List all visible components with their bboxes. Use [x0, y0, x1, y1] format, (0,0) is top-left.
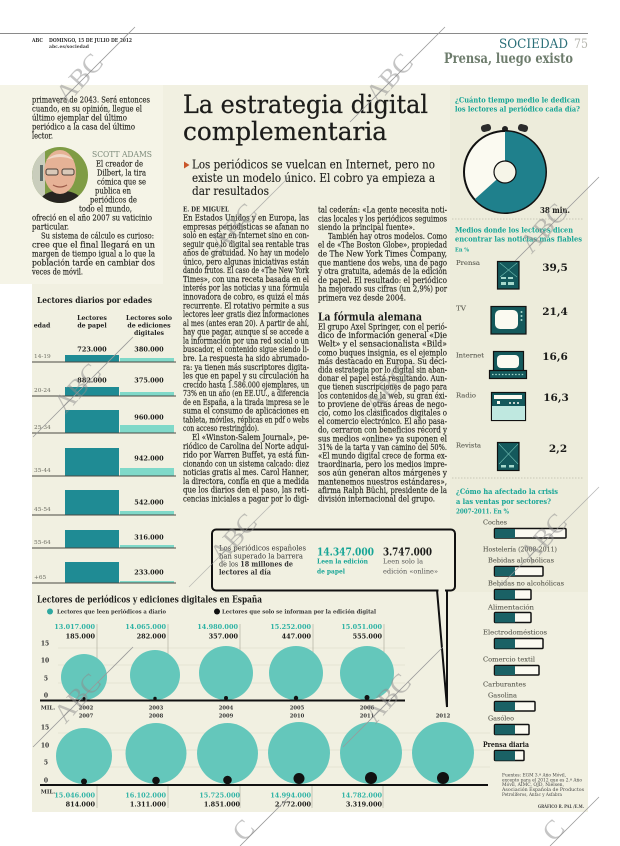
- sector labels: Comercio textil: [483, 656, 535, 664]
- axis labels: 5: [44, 676, 48, 682]
- sources and credit: [501, 772, 584, 810]
- article column 1: al mes (antes eran 20). A partir de ahí,: [183, 318, 309, 329]
- axis labels: MIL.: [41, 706, 55, 712]
- callout: 18 million readers: lectores al día: [219, 568, 271, 576]
- article column 1: interés por las noticias y una fórmula: [183, 283, 309, 294]
- year labels: 2012: [436, 714, 451, 720]
- article column 1: hay que pagar, aunque si se accede a: [183, 328, 309, 338]
- bar values: 723.000: [77, 346, 107, 354]
- media row: Internet: 16,6: [542, 351, 568, 363]
- column headers: [34, 315, 172, 337]
- article column 2: que tienen suscripciones de pago para: [318, 383, 447, 393]
- article column 1: rido por Warren Buffet, ya está fun-: [183, 450, 309, 461]
- bar values: 380.000: [134, 346, 164, 354]
- article column 2: los contenidos de la web, su gran éxi-: [318, 390, 447, 401]
- article column 2: el de «The Boston Globe», propiedad: [318, 241, 447, 251]
- sources and credit: Móvil, AIMC, OJD, Nielsen,: [502, 782, 564, 787]
- legend: [47, 608, 377, 616]
- left column text: primavera de 2043. Será entonces: [32, 94, 150, 106]
- media row: Radio: Radio: [456, 392, 476, 400]
- article column 2: afirma Ralph Büchi, presidente de la: [318, 486, 447, 496]
- article column 2: dida estrategia por lo digital sin aban-: [318, 366, 447, 376]
- sidebar: crisis effect on sales: 2007-2011. En %: [456, 508, 509, 516]
- icon: stopwatch chart: [464, 123, 546, 213]
- chart: daily readers by age: [32, 296, 176, 584]
- article column 2: división internacional del grupo.: [318, 494, 435, 504]
- article column 2: y otra gratuita, además de la edición: [317, 266, 447, 277]
- legend: Lectores que leen periódicos a diario: [57, 608, 166, 616]
- media row: TV: 21,4: [542, 306, 568, 318]
- article column 2: [317, 204, 448, 504]
- sector labels: Electrodomésticos: [483, 628, 548, 636]
- article column 2: cio, como los clasificados digitales o: [318, 408, 447, 418]
- sidebar: crisis effect on sales: [456, 487, 566, 760]
- article column 1: El «Winston-Salem Journal», pe-: [192, 433, 309, 443]
- axis labels: 0: [44, 692, 48, 700]
- digital reader dots: [81, 695, 449, 784]
- axis labels: 15: [41, 724, 49, 732]
- article column 1: riódico de Carolina del Norte adqui-: [183, 441, 309, 452]
- age labels: 55-64: [34, 540, 51, 546]
- age labels: +65: [34, 575, 47, 581]
- year labels: 2005: [290, 706, 305, 712]
- article column 1: cionando con un sistema calcado: diez: [183, 459, 309, 469]
- bar values: 960.000: [134, 414, 164, 422]
- sector labels: Carburantes: [483, 680, 527, 688]
- year labels: 2009: [219, 714, 234, 720]
- bar values: 316.000: [134, 534, 164, 542]
- chart: readers of newspapers and digital editions: Lectores de periódicos y ediciones digitales en España: [37, 594, 262, 606]
- article column 2: el comercio electrónico. El año pasa-: [318, 416, 447, 427]
- watermarks: ABC: ABC: [514, 197, 573, 259]
- watermarks: ABC: ABC: [358, 667, 417, 729]
- page header: [0, 33, 588, 67]
- article column 2: primera vez desde 2004.: [318, 294, 406, 304]
- column headers: edad: [34, 322, 51, 330]
- media row: Prensa: [456, 259, 568, 289]
- bar values: 942.000: [134, 454, 164, 462]
- age labels: 25-34: [34, 425, 51, 431]
- age labels: 35-44: [34, 468, 51, 474]
- sidebar: time spent reading: 38 min.: [540, 205, 570, 215]
- year labels: 2004: [219, 706, 234, 712]
- article column 1: años de gratuidad. No hay un modelo: [183, 249, 309, 259]
- media row: TV: TV: [456, 304, 466, 312]
- left column text: periódico a la casa del último: [32, 122, 135, 132]
- article column 2: «El mundo digital crece de forma ex-: [318, 452, 447, 462]
- sidebar: time spent reading: los lectores al periódico cada día?: [455, 104, 581, 114]
- bottom row values: 15.725.000: [199, 792, 240, 800]
- article column 1: noticias gratis al mes. Carol Hanner,: [183, 468, 309, 478]
- article column 1: lectores leer gratis diez informaciones: [183, 310, 309, 320]
- left column text: publica en: [95, 186, 131, 196]
- article column 1: crecido hasta 1.586.000 ejemplares, un: [183, 380, 309, 390]
- article column 2: El grupo Axel Springer, con el perió-: [318, 322, 447, 332]
- sidebar: crisis effect on sales: a las ventas por sectores?: [456, 497, 552, 506]
- article column 2: ha mejorado sus cifras (un 2,9%) por: [318, 284, 448, 295]
- year labels: 2003: [149, 706, 164, 712]
- chart: readers of newspapers and digital editions: 357.000: [209, 632, 238, 640]
- article column 2: traordinaria, pero los medios impre-: [318, 460, 447, 470]
- media row: TV: [456, 304, 568, 334]
- legend: Lectores que solo se informan por la edición digital: [222, 608, 377, 616]
- title: complementaria: [183, 117, 387, 147]
- article column 2: tal cederán: «La gente necesita noti-: [318, 204, 447, 216]
- subtitle: Los periódicos se vuelcan en Internet, pero no: [192, 158, 435, 172]
- article column 1: suma el consumo de aplicaciones en: [183, 407, 309, 417]
- left column text: margen de tiempo igual a lo que la: [32, 250, 155, 260]
- callout: 18 million readers: de papel: [317, 568, 345, 576]
- sector labels: Alimentación: [487, 604, 535, 612]
- callout: 18 million readers: Leen solo la: [383, 558, 423, 566]
- article column 2: cias locales y los periódicos seguimos: [318, 213, 447, 224]
- article column 1: dando frutos. El caso de «The New York: [183, 266, 310, 276]
- left column text: todo el mundo,: [79, 204, 132, 214]
- axis labels: 10: [41, 658, 49, 664]
- article column 2: mantenemos nuestros estándares»,: [318, 476, 447, 487]
- title: La estrategia digital: [183, 90, 428, 120]
- year labels: 2010: [290, 714, 305, 720]
- left column text: población tarde en cambiar dos: [32, 258, 155, 268]
- chart: readers of newspapers and digital editions: 1.851.000: [204, 800, 240, 808]
- callout: 18 million readers: han superado la barrera: [219, 552, 303, 560]
- sector labels: Bebidas no alcohólicas: [488, 580, 565, 588]
- page header: SOCIEDAD: [499, 37, 568, 52]
- column headers: Lectores: [77, 315, 107, 322]
- article column 2: to proviene de otras áreas de nego-: [318, 399, 447, 410]
- axis labels: [41, 640, 55, 796]
- article column 2: sus medios «online» ya suponen el: [318, 434, 447, 444]
- sidebar: trusted media: encontrar las noticias más fiables: [455, 234, 582, 244]
- callout: 18 million readers: [212, 530, 455, 707]
- left column text: Su sistema de cálculo es curioso:: [41, 230, 154, 242]
- age labels: 14-19: [34, 354, 51, 360]
- watermarks: ABC: ABC: [48, 357, 107, 419]
- article column 2: siendo la principal fuente».: [318, 223, 415, 233]
- top row values: 13.017.000: [54, 623, 95, 631]
- sidebar: crisis effect on sales: Prensa diaria: [483, 740, 529, 749]
- bar values: 542.000: [134, 498, 164, 506]
- bottom row values: 16.102.000: [125, 792, 166, 800]
- article column 1: [183, 214, 310, 504]
- left column text: lector.: [32, 132, 53, 142]
- media row: Internet: [456, 351, 568, 378]
- article column 1: que los diarios den el paso, las reti-: [183, 486, 309, 496]
- article column 1: tableta, móviles, réplicas en pdf o webs: [183, 414, 309, 425]
- left column text: último ejemplar del último: [32, 112, 127, 124]
- page header: DOMINGO, 15 DE JULIO DE 2012: [49, 38, 132, 44]
- watermarks: ABC: ABC: [358, 357, 417, 419]
- chart: readers of newspapers and digital editions: 185.000: [66, 632, 95, 640]
- article column 1: innovadora de cobro, es quizá el más: [183, 292, 309, 302]
- article column 2: La fórmula alemana: [318, 310, 422, 324]
- article column 1: cencias iniciales a pagar por lo digi-: [183, 494, 309, 504]
- year labels: 2006: [360, 706, 375, 712]
- article column 1: buscador, el contenido sigue siendo li-: [183, 345, 309, 355]
- article column 2: que mantiene dos webs, una de pago: [318, 258, 447, 268]
- article column 1: 73% en un año (en EE.UU., a diferencia: [183, 388, 309, 399]
- bottom row values: 15.046.000: [54, 792, 95, 800]
- callout: 18 million readers: 3.747.000: [383, 546, 432, 558]
- left column text: cómica que se: [97, 176, 146, 188]
- sector labels: Coches: [483, 518, 508, 526]
- left column text: Dilbert, la tira: [97, 168, 146, 178]
- bottom row values: [54, 792, 382, 800]
- column headers: de papel: [77, 322, 107, 330]
- axis labels: 10: [41, 742, 49, 750]
- article column 1: con acceso restringido).: [183, 423, 259, 434]
- left column text: cree que el final llegará en un: [32, 240, 155, 250]
- watermarks: ABC: C: [226, 813, 260, 846]
- callout: 18 million readers: de los 18 millones de: [219, 560, 293, 568]
- subtitle: [184, 158, 435, 198]
- left column text: El creador de: [96, 160, 143, 170]
- article column 1: recurrente. El rotativo permite a sus: [183, 301, 309, 311]
- media row: Radio: 16,3: [543, 392, 569, 404]
- sector labels: [483, 518, 565, 722]
- bar values: 375.000: [134, 376, 164, 384]
- page header: ABC: [31, 38, 44, 44]
- left column text: SCOTT ADAMS: [92, 150, 152, 159]
- article column 2: 31% de la tarta y van camino del 50%.: [318, 443, 447, 453]
- sidebar: crisis effect on sales: ¿Cómo ha afectado la crisis: [456, 487, 558, 496]
- media row: Radio: [456, 392, 569, 420]
- chart: readers of newspapers and digital editions: 555.000: [353, 632, 382, 640]
- media row: Internet: Internet: [456, 352, 484, 360]
- chart: readers of newspapers and digital editions: 447.000: [282, 632, 311, 640]
- media row: Revista: [456, 442, 567, 470]
- article column 1: solo en estar en Internet sino en con-: [183, 231, 309, 241]
- watermarks: ABC: ABC: [204, 197, 263, 259]
- chart: readers of newspapers and digital editions: 2.772.000: [275, 800, 311, 808]
- page header: abc.es/sociedad: [49, 44, 89, 50]
- sources and credit: Asociación Española de Productos: [501, 787, 584, 792]
- divider: [452, 477, 584, 479]
- axis labels: 5: [44, 760, 48, 766]
- article column 1: de en España, a la tirada impresa se le: [183, 398, 309, 408]
- article column 1: empresas periodísticas se afanan no: [183, 221, 309, 232]
- media row: Revista: 2,2: [549, 443, 567, 455]
- sources and credit: excepto para el 2012 que es 2.ª Año: [502, 778, 582, 782]
- article column 1: único, pero algunas iniciativas están: [183, 256, 309, 267]
- article column 2: sos aún generan altos márgenes y: [318, 468, 447, 479]
- article column 2: También hay otros modelos. Como: [328, 231, 447, 242]
- chart: readers of newspapers and digital editions: 282.000: [137, 632, 166, 640]
- media row: Revista: Revista: [456, 442, 481, 450]
- top row values: 15.051.000: [341, 623, 382, 631]
- page header: 75: [574, 37, 588, 52]
- chart: readers of newspapers and digital editions: 1.311.000: [130, 800, 166, 808]
- article column 2: do, cerraron con beneficios récord y: [318, 425, 447, 436]
- sidebar: time spent reading: ¿Cuánto tiempo medio le dedican: [455, 96, 580, 104]
- axis labels: MIL.: [41, 790, 55, 796]
- column headers: Lectores solo: [126, 315, 172, 322]
- chart: readers of newspapers and digital editions: [37, 594, 490, 808]
- top row values: 14.065.000: [125, 623, 166, 631]
- age labels: [34, 354, 51, 581]
- chart: readers of newspapers and digital editions: 3.319.000: [346, 800, 382, 808]
- article column 1: bre. La respuesta ha sido abrumado-: [183, 354, 309, 364]
- year labels: 2008: [149, 714, 164, 720]
- article column 2: Welt» y el sensacionalista «Bild»: [318, 340, 447, 350]
- article column 1: En Estados Unidos y en Europa, las: [183, 214, 309, 224]
- article column 1: ra: ya tienen más suscriptores digita-: [183, 362, 309, 373]
- bar values: 233.000: [134, 568, 164, 576]
- callout: 18 million readers: edición «online»: [383, 568, 438, 576]
- byline: E. DE MIGUEL: [183, 206, 230, 214]
- sidebar: trusted media: [455, 226, 582, 470]
- article column 1: la información por una red social o un: [183, 335, 309, 346]
- media row: Prensa: Prensa: [456, 259, 480, 267]
- article column 2: de The New York Times Company,: [318, 250, 447, 260]
- article column 1: la directora, confía en que a medida: [183, 476, 309, 487]
- column headers: de ediciones: [127, 322, 171, 330]
- sources and credit: GRÁFICO R. PAL /E.M.: [538, 803, 584, 810]
- year labels: [79, 706, 451, 720]
- article column 2: de papel. El resultado: el periódico: [318, 275, 447, 286]
- article column 2: donar el papel está resultando. Aun-: [318, 373, 447, 384]
- left column text: ofreció en el año 2007 su vaticinio: [32, 212, 152, 224]
- callout: 18 million readers: Los periódicos españoles: [219, 544, 306, 552]
- sector bars: [494, 528, 566, 760]
- subtitle: dar resultados: [192, 184, 269, 198]
- sector labels: Hostelería (2008-2011): [483, 546, 557, 554]
- left column text: periódicos de: [90, 194, 137, 206]
- chart: daily readers by age: Lectores diarios por edades: [37, 296, 152, 306]
- divider: [452, 218, 584, 220]
- paper reader bars: [65, 355, 119, 583]
- left column text: particular.: [32, 222, 69, 232]
- media row: Prensa: 39,5: [542, 262, 568, 274]
- watermarks: ABC: C: [536, 813, 570, 846]
- top row values: 14.980.000: [197, 623, 238, 631]
- bottom row values: 14.782.000: [341, 792, 382, 800]
- left column text: cuando, en su opinión, llegue el: [32, 104, 142, 114]
- article column 1: Times», con una receta basada en el: [183, 275, 309, 285]
- reader circles 2002-2006: [61, 646, 394, 700]
- bottom row values: 14.994.000: [270, 792, 311, 800]
- watermarks: ABC: ABC: [204, 507, 263, 569]
- sidebar: trusted media: Medios donde los lectores dicen: [455, 226, 573, 234]
- digital reader bars: [120, 358, 174, 583]
- age labels: 45-54: [34, 507, 51, 513]
- year labels: 2007: [79, 714, 94, 720]
- article column 1: les que en papel y su circulación ha: [183, 370, 309, 382]
- axis labels: 0: [44, 778, 48, 784]
- top row values: 15.252.000: [270, 623, 311, 631]
- portrait: Scott Adams: [32, 147, 88, 203]
- title: [183, 90, 428, 147]
- sector labels: Gasolina: [488, 692, 517, 700]
- chart: readers of newspapers and digital editions: 814.000: [66, 800, 95, 808]
- year labels: 2002: [79, 706, 94, 712]
- sector labels: Gasóleo: [488, 714, 514, 722]
- bar values: [77, 346, 164, 576]
- bar values: 882.000: [77, 376, 107, 384]
- callout: 18 million readers: Leen la edición: [317, 558, 368, 566]
- age labels: 20-24: [34, 388, 51, 394]
- subtitle: existe un modelo único. El cobro ya empieza a: [192, 171, 435, 185]
- column headers: digitales: [134, 330, 165, 337]
- sources and credit: Fuentes: EGM 3.ª Año Móvil,: [502, 772, 566, 778]
- watermarks: ABC: ABC: [514, 507, 573, 569]
- page header: Prensa, luego existo: [444, 51, 573, 67]
- sidebar: time spent reading: [455, 96, 581, 215]
- watermarks: ABC: ABC: [48, 667, 107, 729]
- article column 2: como buques insignia, es el ejemplo: [318, 348, 447, 358]
- left column text: veces de móvil.: [31, 266, 83, 278]
- top row values: [54, 623, 382, 631]
- sidebar: trusted media: En %: [455, 248, 470, 254]
- reader circles 2007-2012: [56, 722, 474, 784]
- article column 2: más destacado en Europa. Su deci-: [318, 356, 447, 367]
- article column 1: seguir que lo digital sea rentable tras: [183, 240, 309, 250]
- year labels: 2011: [360, 714, 375, 720]
- article column 2: dico de información general «Die: [318, 330, 447, 341]
- sector labels: Bebidas alcohólicas: [488, 556, 555, 564]
- axis labels: 15: [41, 640, 49, 648]
- callout: 18 million readers: 14.347.000: [317, 546, 374, 558]
- watermarks: ABC: ABC: [50, 47, 109, 109]
- sources and credit: Petrolíferos, Anfac y Asfabra: [502, 792, 562, 797]
- watermarks: ABC: ABC: [360, 47, 419, 109]
- left column text: [31, 94, 155, 278]
